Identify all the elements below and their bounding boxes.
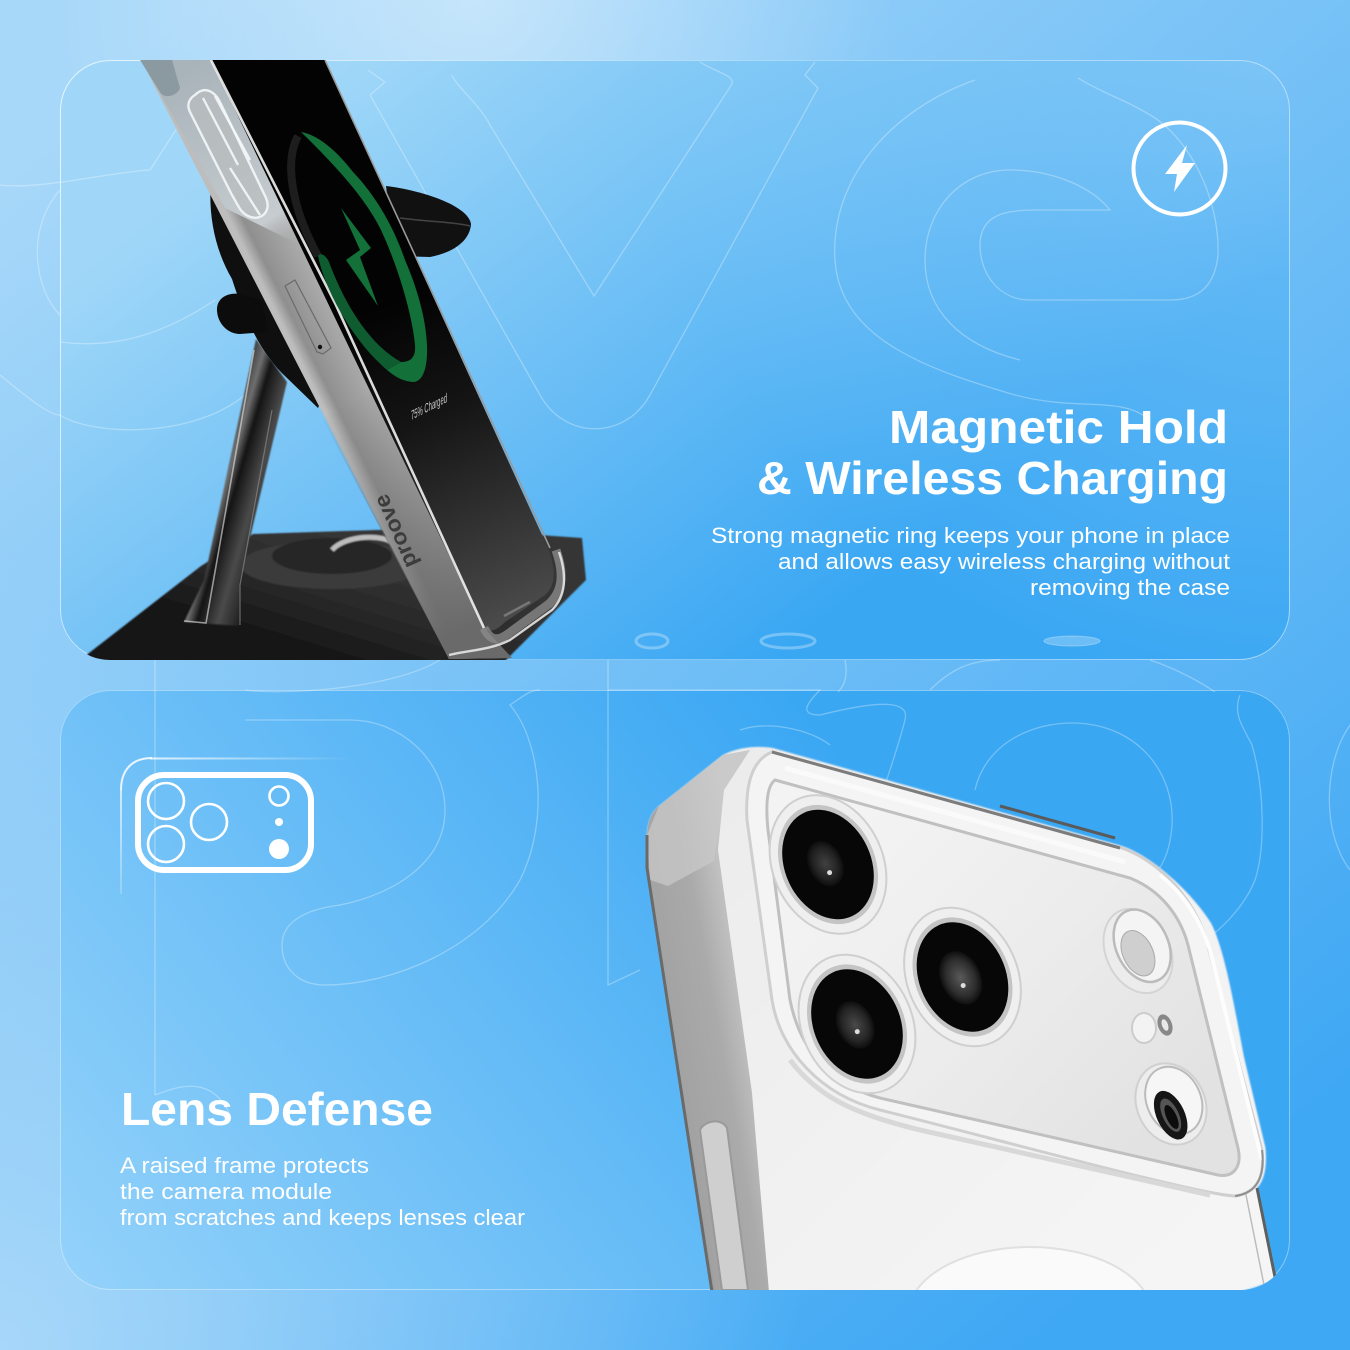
- reflections at panel bottom: [636, 634, 1100, 648]
- disc right side: [386, 186, 471, 257]
- text block: magnetic hold description: and allows easy wireless charging without: [778, 549, 1230, 574]
- heading: lens defense: Lens Defense: [121, 1083, 433, 1135]
- brand wordmark: proove: [368, 491, 423, 572]
- lower right edge: [1257, 1188, 1276, 1282]
- rear knob: [216, 294, 254, 334]
- panel: lens defense: [60, 690, 1290, 1290]
- lens: bottom: [798, 954, 916, 1094]
- heading: magnetic hold: [757, 401, 1228, 504]
- text block: magnetic hold description: [711, 523, 1230, 600]
- side button: [700, 1121, 748, 1290]
- side buttons: [188, 90, 268, 218]
- gray side band: [647, 750, 769, 1292]
- panel: magnetic hold: [60, 60, 1290, 660]
- clear lower frame: [449, 550, 564, 655]
- raised camera frame: [747, 752, 1263, 1196]
- text block: lens defense description: [120, 1153, 525, 1230]
- background outline lettering: [0, 62, 1350, 1115]
- white screen edge: [211, 60, 484, 628]
- microphone: [1132, 1012, 1175, 1043]
- text block: lens defense description: A raised frame protects: [120, 1153, 369, 1178]
- phone screen: [211, 60, 554, 630]
- heading: magnetic hold: Magnetic Hold: [889, 401, 1228, 453]
- heading: magnetic hold: & Wireless Charging: [757, 452, 1228, 504]
- lidar cutout: [1122, 1052, 1220, 1156]
- magnetic disc back: [210, 194, 319, 408]
- text block: lens defense description: the camera module: [120, 1179, 332, 1204]
- icon: camera module: [121, 758, 350, 894]
- charger base: [80, 528, 586, 662]
- product photo: phone on magnetic stand: [80, 60, 586, 662]
- charging ring: [291, 132, 427, 382]
- lens: middle: [903, 906, 1022, 1048]
- phone case side band: [141, 60, 512, 659]
- product photo: clear case camera close-up: [647, 747, 1276, 1350]
- stand leg: [184, 339, 287, 626]
- SIM tray: [285, 280, 331, 354]
- text block: lens defense description: from scratches and keeps lenses clear: [120, 1205, 525, 1230]
- text block: magnetic hold description: removing the case: [1030, 575, 1230, 600]
- text block: magnetic hold description: Strong magnetic ring keeps your phone in place: [711, 523, 1230, 548]
- icon: lightning in circle: [1134, 122, 1226, 214]
- lightning bolt on screen: [341, 208, 378, 306]
- case silhouette: [647, 747, 1276, 1292]
- magnetic ring: [916, 1246, 1144, 1290]
- flash cutout: [1102, 908, 1174, 994]
- charge label: 75% Charged: [411, 390, 447, 423]
- lens: top: [768, 794, 888, 935]
